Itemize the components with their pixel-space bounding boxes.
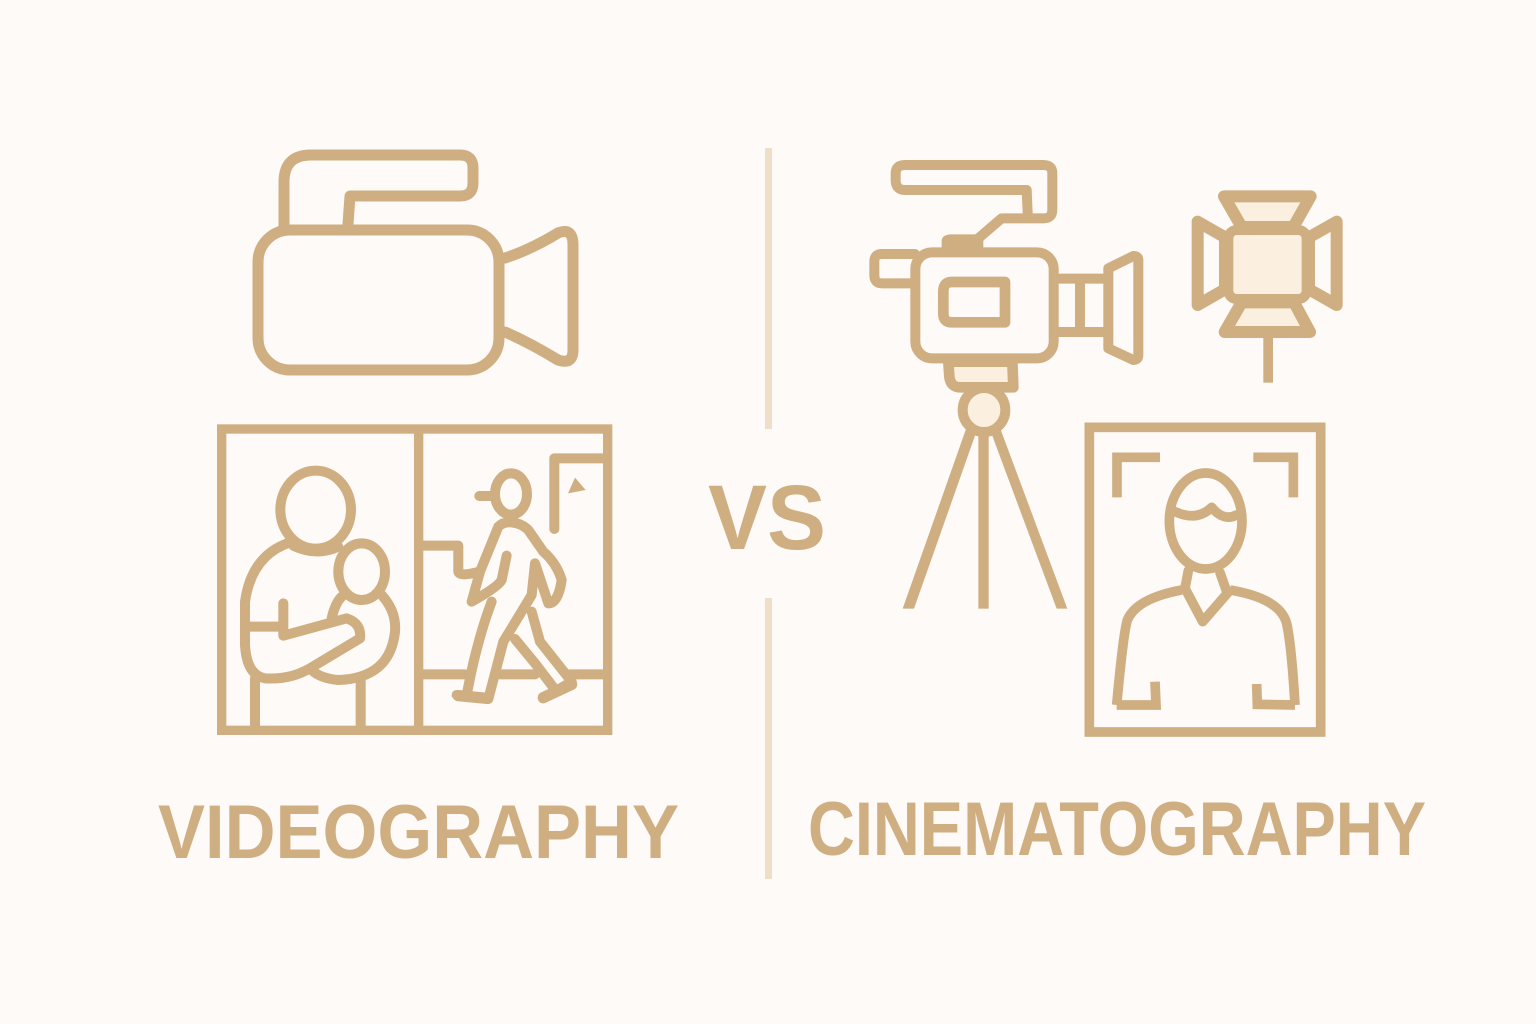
camera head (874, 165, 1138, 360)
frame (1089, 427, 1321, 732)
tripod (903, 388, 1067, 609)
figure: parent holding baby (245, 471, 395, 728)
icon: cinema camera on tripod (874, 165, 1138, 387)
collar (1185, 571, 1227, 622)
icon: studio light (1198, 196, 1337, 383)
divider: top (765, 148, 772, 429)
figure: walking person with door (423, 458, 607, 699)
heading: cinematography: CINEMATOGRAPHY (808, 787, 1426, 872)
panel: videography scene (222, 429, 608, 730)
mount (942, 234, 983, 248)
VS label: VS (708, 467, 826, 569)
shoulders (1117, 590, 1182, 705)
icon: video camera (258, 155, 573, 370)
divider: bottom (765, 598, 772, 879)
heading: videography: VIDEOGRAPHY (158, 790, 679, 875)
frame (222, 429, 608, 730)
focus brackets (1117, 457, 1295, 705)
panel: framed portrait (1089, 427, 1321, 732)
head and hair (1169, 473, 1242, 569)
icon: door sign (568, 478, 586, 493)
